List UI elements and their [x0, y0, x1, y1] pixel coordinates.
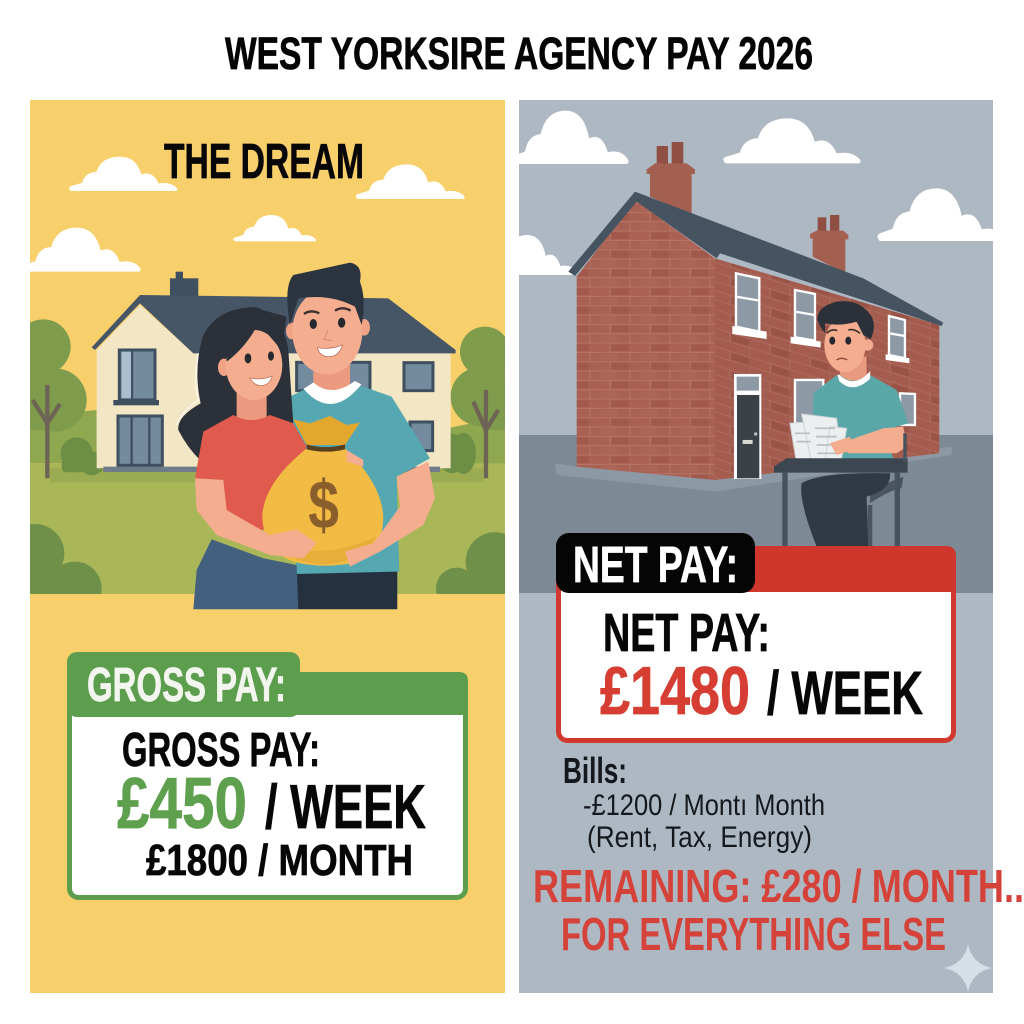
walls: [577, 200, 715, 480]
panel: the dream: [6, 100, 524, 993]
bills breakdown: -£1200 / Montı Month: [583, 789, 825, 822]
door: [734, 374, 761, 479]
illustration: dream house and garden: [30, 272, 505, 594]
net pay tab label: NET PAY:: [573, 536, 738, 593]
windows: [736, 273, 915, 425]
title: WEST YORKSIRE AGENCY PAY 2026: [225, 28, 813, 79]
gross pay heading: GROSS PAY:: [122, 724, 320, 777]
gross monthly amount: £1800 / MONTH: [146, 836, 413, 885]
bills breakdown: [563, 750, 825, 854]
sparkle watermark: [944, 944, 992, 992]
dollar symbol: $: [308, 466, 339, 543]
panel: the reality: [484, 100, 1004, 993]
per week label: / WEEK: [767, 659, 923, 727]
house: [97, 305, 451, 468]
man: [297, 568, 397, 609]
net weekly amount: £1480: [600, 653, 750, 729]
papers: [790, 414, 847, 463]
clouds: dream sky: [21, 157, 465, 272]
arms: [195, 478, 317, 558]
gross pay tab label: GROSS PAY:: [87, 659, 286, 712]
front bushes: [30, 524, 505, 594]
gross weekly amount: £450: [117, 764, 247, 844]
roof: [568, 192, 943, 326]
bills breakdown: Bills:: [563, 750, 627, 791]
remaining money callout: [533, 860, 1024, 960]
stat card: net pay: [556, 533, 956, 740]
illustration: terraced brick house: [555, 142, 952, 492]
table: [774, 458, 908, 473]
money bag: [262, 448, 383, 566]
bills breakdown: (Rent, Tax, Energy): [587, 821, 812, 854]
chimneys: [656, 146, 668, 164]
heading: the dream: THE DREAM: [164, 135, 364, 189]
illustration: worried man with bills at table: [774, 301, 908, 547]
illustration: couple with money bag: [177, 263, 435, 609]
per week label: / WEEK: [265, 773, 426, 842]
clouds: grey sky: [484, 111, 1004, 275]
woman: [178, 307, 293, 460]
stat card: gross pay: [67, 652, 468, 898]
net pay heading: NET PAY:: [603, 603, 770, 663]
